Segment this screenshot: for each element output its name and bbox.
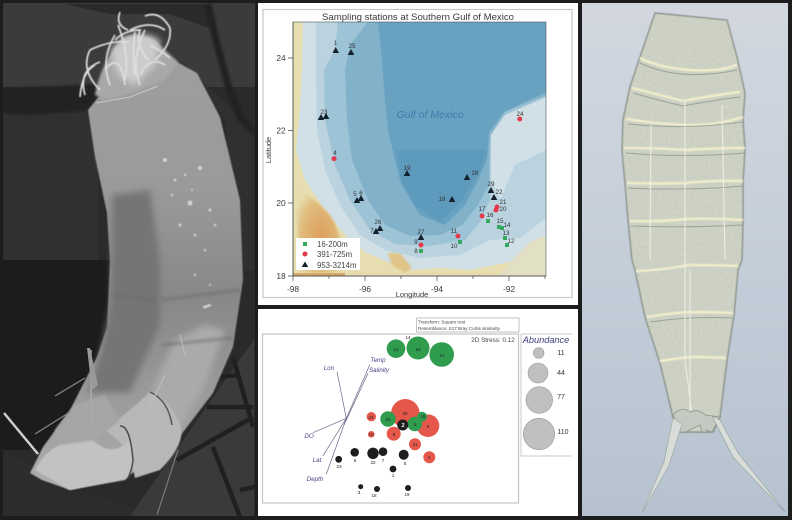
bubble station labels: 9 (427, 424, 430, 429)
bubble station labels: 4 (428, 455, 431, 460)
station number labels: 29 (488, 181, 495, 188)
station number labels: 5 (353, 191, 357, 198)
map axes: 18 (276, 271, 286, 281)
vector labels: Salinity (369, 367, 390, 374)
vector labels: DO (304, 433, 314, 440)
station number labels: 1 (334, 40, 338, 47)
bubble station labels: 3 (358, 490, 361, 495)
station number labels: 10 (451, 243, 458, 250)
bubble station labels: 16 (385, 417, 391, 422)
bubble station labels: 20 (402, 411, 408, 416)
station number labels: 13 (503, 230, 510, 237)
map legend: 391-725m (317, 250, 352, 259)
map axes: 22 (276, 126, 286, 136)
station number labels: 12 (508, 238, 515, 245)
bubble station labels: 6 (354, 458, 357, 463)
station number labels: 19 (404, 165, 411, 172)
vector labels: Lat (313, 457, 322, 464)
station number labels: 14 (504, 222, 511, 229)
station number labels: 15 (497, 218, 504, 225)
bathymetric map (293, 22, 546, 276)
map axes: -96 (359, 284, 371, 294)
bubble station labels: 11 (413, 442, 418, 447)
station number labels: 28 (472, 170, 479, 177)
station markers: deep triangles (318, 47, 497, 240)
vector labels: Lon (324, 365, 335, 372)
station number labels: 25 (349, 43, 356, 50)
map axes: Latitude (264, 137, 273, 163)
panel: scanning electron micrograph of worm (3, 3, 255, 517)
station number labels: 7 (370, 228, 374, 235)
station number labels: 22 (496, 189, 503, 196)
longitudinal lines (650, 100, 725, 415)
map axes: 20 (276, 198, 286, 208)
worm body (30, 60, 243, 490)
station number labels: 21 (500, 199, 507, 206)
station number labels: 24 (517, 111, 524, 118)
bubble station labels: 24 (368, 415, 374, 420)
panel: ordination bubble plot (258, 309, 578, 516)
abundance legend: 77 (557, 394, 565, 401)
map axes: 24 (276, 53, 286, 63)
station number labels: 9 (414, 239, 418, 246)
abundance legend: 44 (557, 370, 565, 377)
station markers: shelf squares (419, 219, 509, 253)
bubble station labels: 6 (414, 422, 417, 427)
bubble station labels: 13 (393, 347, 399, 352)
station number labels: 6 (359, 190, 363, 197)
station number labels: 20 (500, 206, 507, 213)
panel: sampling stations map (258, 3, 578, 305)
bubble station labels: 10 (368, 432, 374, 437)
bubble station labels: 7 (382, 458, 385, 463)
worm body dorsal view (622, 13, 745, 432)
abundance legend: 11 (557, 350, 565, 357)
bubble station labels: 18 (371, 493, 377, 498)
mid cluster green bubbles (380, 411, 427, 431)
map axes: -94 (431, 284, 443, 294)
worm ciliated head tuft (80, 12, 178, 100)
deep stations: black bubbles (335, 420, 411, 492)
bubble station labels: 18 (420, 414, 426, 419)
map legend (296, 238, 360, 270)
transform note: Transform: Square root (418, 320, 466, 324)
bubble station labels: 1 (392, 473, 395, 478)
worm setae and spines (4, 335, 185, 515)
station number labels: 26 (375, 219, 382, 226)
bubble station labels: 15 (415, 347, 421, 352)
bubble station labels: 8 (393, 432, 396, 437)
bubble station labels: 23 (336, 464, 342, 469)
station markers: mid-depth circles (332, 116, 522, 248)
panel: light micrograph of worm (582, 3, 788, 516)
tail fork (673, 409, 720, 432)
vector labels (304, 357, 390, 483)
transform note: Resemblance: S17 Bray Curtis similarity (418, 326, 501, 331)
station number labels: 11 (451, 228, 458, 235)
station number labels: 18 (439, 196, 446, 203)
bubble station labels: 22 (370, 460, 376, 465)
map axes: -92 (503, 284, 515, 294)
map title: Sampling stations at Southern Gulf of Mexico (322, 12, 514, 23)
map water label: Gulf of Mexico (396, 109, 464, 121)
mid-depth stations: red bubbles (367, 399, 439, 463)
station number labels: 16 (487, 212, 494, 219)
bubble station labels (336, 335, 445, 498)
map axes (264, 22, 546, 299)
map axes: -98 (287, 284, 299, 294)
environmental vectors (313, 365, 370, 474)
station number labels: 23 (321, 109, 328, 116)
bubble station labels: 14 (405, 335, 411, 340)
vector labels: Temp (370, 357, 386, 364)
transform note (416, 318, 519, 332)
caudal spines (642, 416, 785, 513)
shallow stations: green bubbles (387, 336, 454, 367)
station number labels: 17 (479, 206, 486, 213)
vector labels: Depth (307, 476, 324, 483)
map axes: Longitude (396, 290, 428, 299)
abundance legend: Abundance (522, 335, 569, 345)
station number labels: 4 (333, 150, 337, 157)
bubble station labels: 12 (439, 353, 445, 358)
station number labels: 8 (414, 248, 418, 255)
abundance legend: 110 (557, 429, 569, 436)
body segment ridges (624, 58, 745, 361)
bubble station labels: 5 (404, 461, 407, 466)
station number labels (321, 40, 524, 255)
bubble station labels: 19 (404, 492, 410, 497)
abundance legend (521, 334, 572, 456)
station number labels: 27 (418, 229, 425, 236)
map legend: 953-3214m (317, 261, 356, 270)
stress value: 2D Stress: 0.12 (471, 337, 515, 344)
map legend: 16-200m (317, 240, 348, 249)
bubble station labels: 2 (401, 423, 405, 429)
